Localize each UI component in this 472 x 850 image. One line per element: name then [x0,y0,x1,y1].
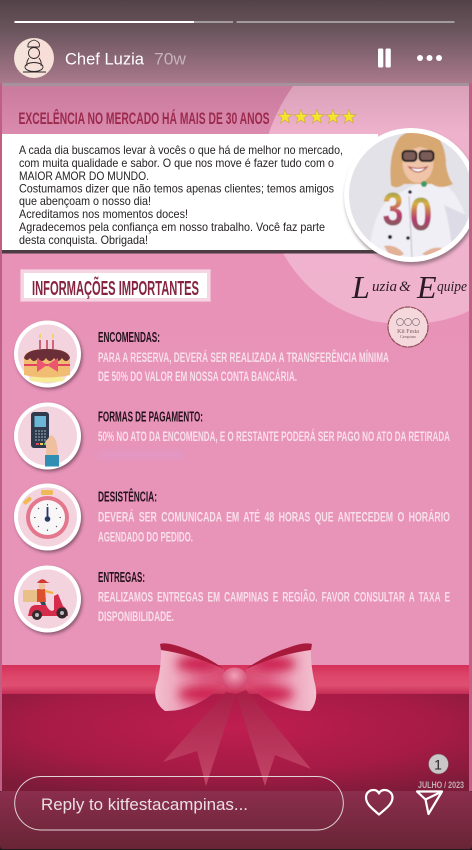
icon: more dots [417,55,442,61]
message text: que abençoam o nosso dia! [19,194,151,208]
section: encomendas: ENCOMENDAS: [98,330,160,346]
coat [370,184,464,257]
page number badge [428,754,448,774]
message text: desta conquista. Obrigada! [19,233,148,247]
badge: Kit Festa logo: Campinas [400,334,416,339]
progress bars [14,21,454,23]
section: desistencia: AGENDADO DO PEDIDO. [98,530,193,544]
signature: & [399,279,411,295]
badge: Kit Festa logo [388,307,428,347]
message text: Acreditamos nos momentos doces! [19,207,188,221]
signature: L [351,269,370,305]
page number badge: 1 [434,756,442,772]
hands [384,245,442,256]
icon: heart [366,790,392,814]
top app bar background [0,0,472,84]
section: desistencia: DESISTÊNCIA: [98,488,157,506]
icon: card machine [14,402,82,472]
light curved background [268,86,469,324]
signature: E [416,269,437,305]
icon: cake [14,320,82,390]
bow left loop [155,650,224,711]
section: entregas: DISPONIBILIDADE. [98,609,174,624]
section: entregas [98,570,450,624]
bow tails [163,692,236,786]
portrait photo: 0 [410,188,432,240]
panel background [2,86,469,665]
icon: stopwatch [14,484,82,552]
hair [390,129,453,187]
message text: com muita qualidade e sabor. O que nos move é fazer tudo com o [19,156,334,170]
buttons [388,235,392,239]
timestamp: 70w [154,50,186,68]
glasses [402,151,416,161]
heading box: important information [20,270,210,302]
section: encomendas: DE 50% DO VALOR EM NOSSA CONTA BANCÁRIA. [98,369,297,384]
bow [150,640,320,786]
signature: quipe [437,279,467,295]
collar badge [421,181,427,187]
panel: welcome message [2,134,378,254]
signature: uzia [372,279,397,295]
message text: MAIOR AMOR DO MUNDO. [19,169,149,183]
icon: send [417,792,442,814]
section: formas de pagamento: FORMAS DE PAGAMENTO: [98,410,203,426]
horizontal ribbon band [2,665,469,694]
balloons: 3 [382,183,404,235]
faint smudge [101,452,180,456]
reply input [15,776,343,830]
reply input: Reply to kitfestacampinas... [41,796,248,814]
section: desistencia [98,488,450,544]
badge: Kit Festa logo: Kit Festa [397,329,419,335]
section: entregas: ENTREGAS: [98,570,145,586]
face [402,143,434,183]
smile [409,167,427,172]
icon: delivery scooter [14,566,82,634]
icon: five stars [278,110,356,123]
message text: Agradecemos pela confiança em nosso trabalho. Você faz parte [19,220,325,234]
lower dark red area [2,693,469,791]
heading: excellence: EXCELÊNCIA NO MERCADO HÁ MAIS DE 30 ANOS [18,109,270,128]
section: formas de pagamento [98,410,450,444]
section: encomendas [98,330,389,384]
heading box: important information: INFORMAÇÕES IMPORTANTES [32,276,199,300]
bow right loop [246,650,316,711]
bow knot [222,668,248,690]
avatar [14,38,54,78]
portrait photo [344,128,472,265]
bottom app bar background [0,790,472,849]
icon: pause [378,48,391,68]
message text [19,143,343,247]
message text: Costumamos dizer que não temos apenas clientes; temos amigos [19,182,334,196]
message text: A cada dia buscamos levar à vocês o que há de melhor no mercado, [19,143,343,157]
username: Chef Luzia [65,50,145,68]
